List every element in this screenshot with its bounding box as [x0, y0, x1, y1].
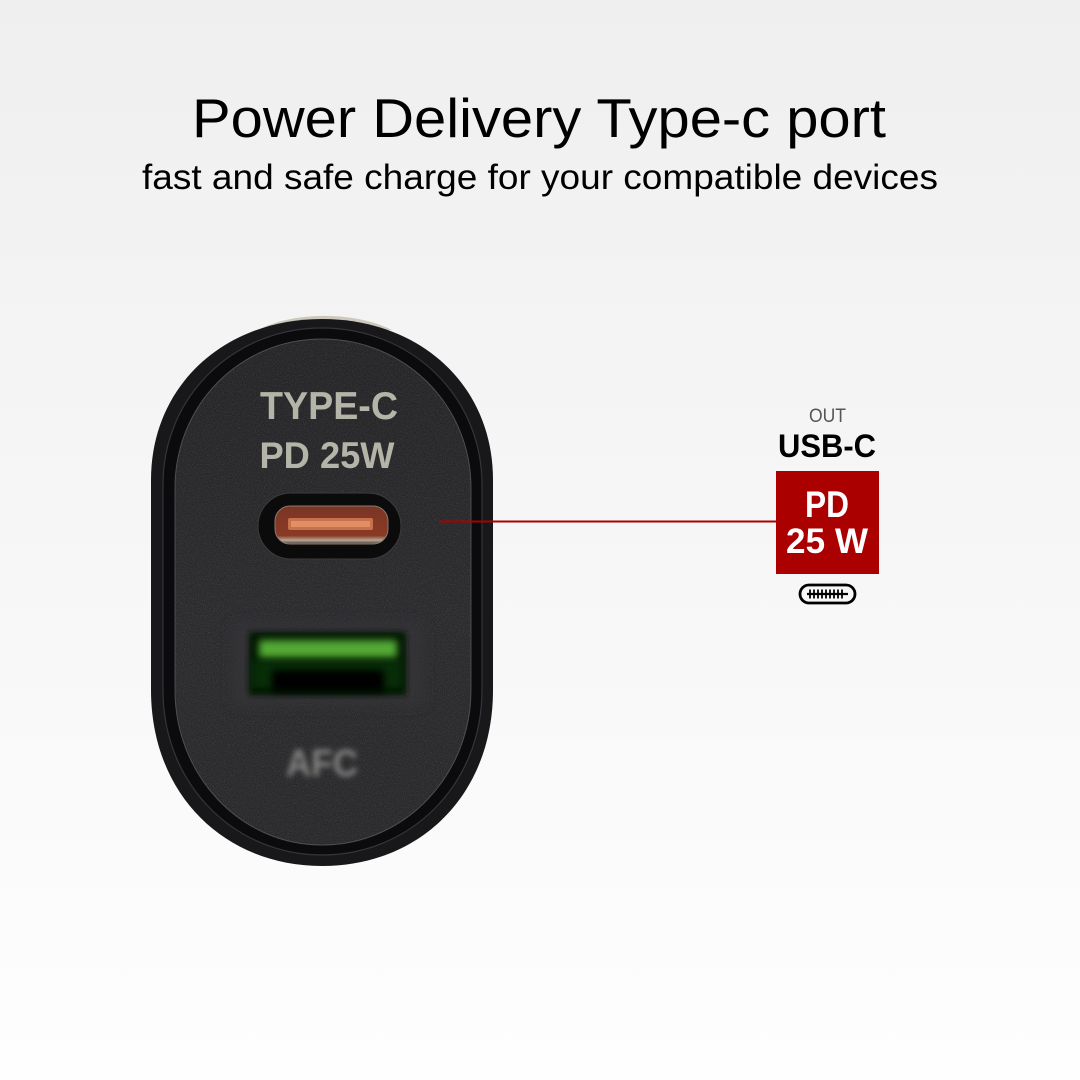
- subtitle: fast and safe charge for your compatible devices: [142, 158, 938, 197]
- port tongue contacts: [291, 521, 370, 527]
- OUT label: OUT: [809, 406, 846, 427]
- badge text: 25 W: 25 W: [786, 522, 868, 561]
- charger face: [175, 339, 471, 845]
- badge text: PD: PD: [805, 484, 849, 525]
- connector line: [439, 520, 777, 522]
- icon: USB-C connector: [800, 585, 855, 603]
- USB-C label: USB-C: [778, 428, 876, 464]
- USB-C output spec: [776, 406, 879, 603]
- port metal shell: [275, 506, 388, 544]
- charger bezel ring: [163, 328, 482, 855]
- charger product illustration: [151, 316, 493, 866]
- port inner black pins: [272, 670, 384, 692]
- USB-A port (blurred): [232, 622, 424, 706]
- port green band: [259, 640, 397, 658]
- charger top highlight: [255, 316, 392, 336]
- red PD badge: [776, 471, 879, 574]
- USB-C port: [258, 493, 401, 559]
- printed label: PD 25W: PD 25W: [260, 435, 395, 476]
- printed label: TYPE-C: TYPE-C: [260, 385, 398, 428]
- charger outer shell: [151, 319, 493, 866]
- port recess: [258, 493, 401, 559]
- title: Power Delivery Type-c port: [192, 87, 886, 149]
- port orange tongue: [288, 518, 373, 530]
- face texture: [175, 339, 471, 845]
- port lower green glow: [252, 660, 402, 688]
- port halo: [232, 622, 424, 706]
- port dark opening: [249, 632, 406, 695]
- AFC label (blurred): AFC: [286, 743, 358, 785]
